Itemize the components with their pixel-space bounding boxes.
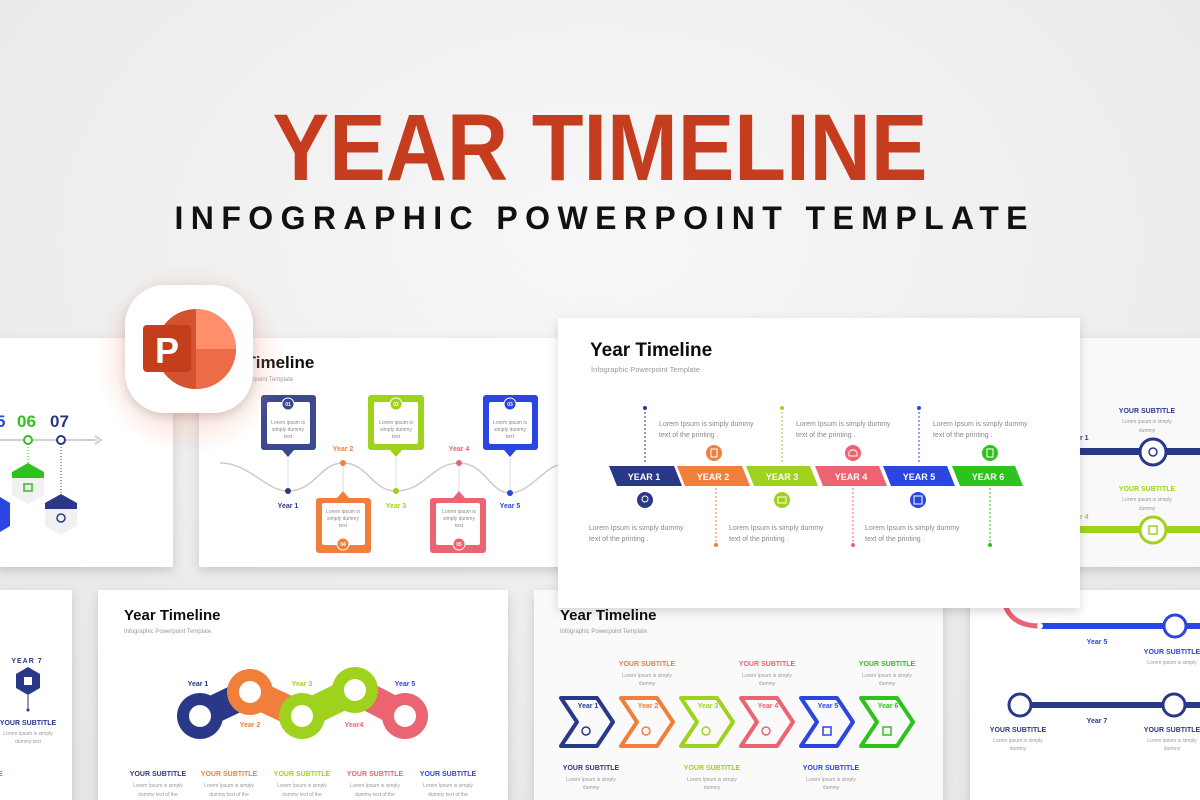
icon: powerpoint: P xyxy=(155,330,179,371)
descriptions: Lorem Ipsum is simply dummy xyxy=(729,525,824,532)
slide: bottom left: dummy text xyxy=(15,739,42,745)
slide: bottom right: YOUR SUBTITLE xyxy=(990,727,1047,734)
slide: top left hexagon timeline: 07 xyxy=(50,412,69,431)
slide: top left hexagon timeline: 06 xyxy=(17,412,36,431)
slide: bottom chevron timeline: YOUR SUBTITLE xyxy=(803,765,860,772)
chevron bar xyxy=(609,466,1023,486)
slide: top right: Lorem ipsum is simply xyxy=(1122,497,1172,503)
slide: bottom chain timeline: Lorem Ipsum is simply xyxy=(133,783,183,789)
callouts: text xyxy=(506,434,515,440)
descriptions: Lorem Ipsum is simply dummy xyxy=(589,525,684,532)
slide: top right xyxy=(1060,338,1200,567)
slide: top right: r 4 xyxy=(1080,514,1089,521)
slide: bottom chevron timeline: Lorem Ipsum is simply xyxy=(566,777,616,783)
chevron bar: YEAR 2 xyxy=(697,472,729,482)
slide: wave timeline: Year 4 xyxy=(449,446,469,453)
slide: bottom chevron timeline: YOUR SUBTITLE xyxy=(739,661,796,668)
slide: top right: dummy xyxy=(1139,428,1156,434)
title: YEAR TIMELINE xyxy=(272,95,928,201)
slide: bottom chain timeline: Year 1 xyxy=(188,681,208,688)
callouts: simply dummy xyxy=(443,516,475,522)
chevron bar: YEAR 4 xyxy=(835,472,867,482)
descriptions: text of the printing . xyxy=(933,432,993,439)
slide: bottom chain timeline: Lorem Ipsum is simply xyxy=(423,783,473,789)
slide: wave timeline: Year 3 xyxy=(386,503,406,510)
callouts xyxy=(261,395,538,553)
slide: bottom chain timeline: YOUR SUBTITLE xyxy=(347,771,404,778)
slide: top right: YOUR SUBTITLE xyxy=(1119,408,1176,415)
slide: wave timeline: Year Timeline xyxy=(205,353,314,372)
callouts: Lorem ipsum is xyxy=(442,509,476,515)
slide: bottom chevron timeline: Lorem Ipsum is simply xyxy=(862,673,912,679)
descriptions: text of the printing . xyxy=(729,536,789,543)
callouts: Lorem ipsum is xyxy=(326,509,360,515)
chevron bar: YEAR 5 xyxy=(903,472,935,482)
slide: bottom chevron timeline: YOUR SUBTITLE xyxy=(619,661,676,668)
dotted connectors xyxy=(645,408,990,545)
slide: wave timeline: Year 5 xyxy=(500,503,520,510)
slide: bottom chain timeline: Lorem Ipsum is simply xyxy=(277,783,327,789)
slide: bottom right: Year 7 xyxy=(1087,718,1107,725)
slide: bottom chain timeline: Year 2 xyxy=(240,722,260,729)
slide: bottom right: Year 5 xyxy=(1087,639,1107,646)
callouts: Lorem ipsum is xyxy=(271,420,305,426)
slide: bottom chevron timeline: Lorem Ipsum is simply xyxy=(806,777,856,783)
callouts: 01 xyxy=(285,402,291,408)
slide: bottom chevron timeline: YOUR SUBTITLE xyxy=(859,661,916,668)
callouts: 02 xyxy=(393,402,399,408)
slide: bottom chain timeline: Year 5 xyxy=(395,681,415,688)
descriptions: text of the printing . xyxy=(589,536,649,543)
slide: bottom chain timeline: dummy text of the xyxy=(428,792,468,798)
callouts: 04 xyxy=(340,542,346,548)
callouts: simply dummy xyxy=(380,427,412,433)
slide: bottom chain timeline: YOUR SUBTITLE xyxy=(420,771,477,778)
slide: bottom chevron timeline: YOUR SUBTITLE xyxy=(684,765,741,772)
slide: bottom right: dummy xyxy=(1164,746,1181,752)
callouts: simply dummy xyxy=(494,427,526,433)
slide: bottom chain timeline: Infographic Powerpoint Template xyxy=(124,629,212,635)
callouts: simply dummy xyxy=(272,427,304,433)
slide: bottom chain timeline: YOUR SUBTITLE xyxy=(130,771,187,778)
slide: bottom chevron timeline: Year 2 xyxy=(638,703,658,710)
slide: bottom chain timeline: dummy text of the xyxy=(138,792,178,798)
slide: top right: dummy xyxy=(1139,506,1156,512)
slide: bottom chain timeline: Lorem Ipsum is simply xyxy=(350,783,400,789)
chevron bar: YEAR 1 xyxy=(628,472,660,482)
slide: bottom chevron timeline: dummy xyxy=(639,681,656,687)
subtitle: INFOGRAPHIC POWERPOINT TEMPLATE xyxy=(174,200,1028,236)
descriptions: text of the printing . xyxy=(865,536,925,543)
slide: bottom chain timeline: YOUR SUBTITLE xyxy=(201,771,258,778)
slide: bottom left: Lorem ipsum is simply xyxy=(3,731,53,737)
descriptions xyxy=(589,421,1028,543)
slide: bottom chevron timeline: Lorem Ipsum is simply xyxy=(687,777,737,783)
slide: bottom chevron timeline: Year 5 xyxy=(818,703,838,710)
callouts: 05 xyxy=(456,542,462,548)
slide: bottom chain timeline: dummy text of the xyxy=(355,792,395,798)
slide: bottom chevron timeline: dummy xyxy=(583,785,600,791)
slide: bottom chevron timeline xyxy=(534,590,943,800)
slide: bottom chevron timeline: Lorem Ipsum is simply xyxy=(622,673,672,679)
slide: bottom chevron timeline: dummy xyxy=(759,681,776,687)
callouts: Lorem ipsum is xyxy=(493,420,527,426)
slide: bottom chevron timeline: dummy xyxy=(823,785,840,791)
slide: bottom right: YOUR SUBTITLE xyxy=(1144,649,1200,656)
slide: bottom chevron timeline: Lorem Ipsum is simply xyxy=(742,673,792,679)
slide: bottom chevron timeline: Infographic Powerpoint Template xyxy=(560,629,648,635)
slide: bottom chevron timeline: Year Timeline xyxy=(560,607,656,624)
slide: bottom chain timeline: YOUR SUBTITLE xyxy=(274,771,331,778)
callouts: 03 xyxy=(507,402,513,408)
slide: bottom chain timeline xyxy=(98,590,508,800)
slide: bottom left: YOUR SUBTITLE xyxy=(0,720,57,727)
slide: wave timeline xyxy=(199,338,569,567)
slide: bottom chevron timeline: Year 3 xyxy=(698,703,718,710)
slide: bottom chevron timeline: Year 4 xyxy=(758,703,778,710)
icon: powerpoint xyxy=(95,265,285,455)
chevron bar: YEAR 6 xyxy=(972,472,1004,482)
slide: bottom right: Lorem ipsum is simply xyxy=(1147,738,1197,744)
slide: bottom left xyxy=(0,590,72,800)
chevron bar: YEAR 3 xyxy=(766,472,798,482)
slide: bottom right xyxy=(970,590,1200,800)
callouts: simply dummy xyxy=(327,516,359,522)
slide: bottom chevron timeline: Year 1 xyxy=(578,703,598,710)
callouts: text xyxy=(339,523,348,529)
icons xyxy=(637,445,998,508)
slide: bottom chain timeline: Lorem Ipsum is simply xyxy=(204,783,254,789)
slide: bottom right: YOUR SUBTITLE xyxy=(1144,727,1200,734)
callouts: text xyxy=(392,434,401,440)
slide: top right: Lorem ipsum is simply xyxy=(1122,419,1172,425)
slide: bottom chevron timeline: YOUR SUBTITLE xyxy=(563,765,620,772)
slide: bottom right: Lorem ipsum is simply xyxy=(1147,660,1197,666)
slide: wave timeline: Year 2 xyxy=(333,446,353,453)
slide: wave timeline: Infographic Powerpoint Template xyxy=(206,377,294,383)
heading: slide title: Year Timeline xyxy=(590,340,712,361)
slide: bottom chain timeline: dummy text of the xyxy=(209,792,249,798)
slide: bottom chain timeline: Year 3 xyxy=(292,681,312,688)
descriptions: text of the printing . xyxy=(659,432,719,439)
slide: bottom chain timeline: Year4 xyxy=(345,722,363,729)
slide: bottom chevron timeline: dummy xyxy=(879,681,896,687)
callouts: text xyxy=(455,523,464,529)
slide: wave timeline: Year 1 xyxy=(278,503,298,510)
slide: top right: r 1 xyxy=(1080,435,1089,442)
slide: center main chevron timeline: Infographic Powerpoint Template xyxy=(591,365,700,374)
descriptions: Lorem Ipsum is simply dummy xyxy=(933,421,1028,428)
slide: bottom chevron timeline: Year 6 xyxy=(878,703,898,710)
slide: bottom right: dummy xyxy=(1010,746,1027,752)
slide: bottom right: Lorem ipsum is simply xyxy=(993,738,1043,744)
slide: bottom chain timeline: dummy text of the xyxy=(282,792,322,798)
descriptions: Lorem Ipsum is simply dummy xyxy=(865,525,960,532)
slide: bottom chain timeline: Year Timeline xyxy=(124,607,220,624)
descriptions: text of the printing . xyxy=(796,432,856,439)
slide: bottom chevron timeline: dummy xyxy=(704,785,721,791)
callouts: Lorem ipsum is xyxy=(379,420,413,426)
slide: center main chevron timeline xyxy=(558,318,1080,608)
descriptions: Lorem Ipsum is simply dummy xyxy=(796,421,891,428)
slide: top right: YOUR SUBTITLE xyxy=(1119,486,1176,493)
callouts: text xyxy=(284,434,293,440)
slide: top left hexagon timeline xyxy=(0,338,173,567)
descriptions: Lorem Ipsum is simply dummy xyxy=(659,421,754,428)
slide: bottom left: YEAR 7 xyxy=(11,658,43,665)
